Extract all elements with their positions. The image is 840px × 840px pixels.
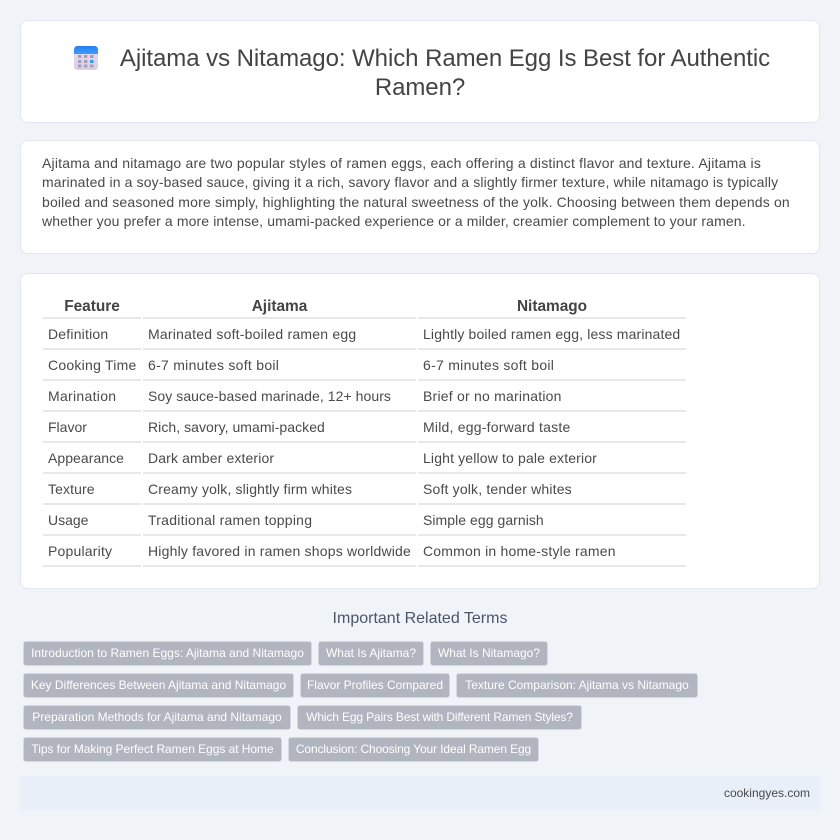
intro paragraph: marinated in a soy-based sauce, giving it a rich, savory flavor and a slightly firmer texture, while nitamago is typically	[42, 174, 778, 190]
table: Common in home-style ramen	[423, 543, 616, 559]
table: 6-7 minutes soft boil	[148, 357, 279, 373]
related term tags: Which Egg Pairs Best with Different Ramen Styles?	[306, 710, 573, 724]
table: Marinated soft-boiled ramen egg	[148, 326, 356, 342]
title: Ajitama vs Nitamago: Which Ramen Egg Is Best for Authentic	[120, 45, 770, 72]
comparison table panel	[20, 273, 820, 589]
table	[43, 298, 686, 567]
related term tags: Tips for Making Perfect Ramen Eggs at Home	[31, 742, 274, 756]
footer bar	[20, 776, 820, 810]
table: Cooking Time	[48, 357, 137, 373]
table header: Feature	[64, 298, 120, 315]
related term tags: Key Differences Between Ajitama and Nitamago	[31, 678, 286, 692]
related term tags: Flavor Profiles Compared	[307, 678, 443, 692]
table: Traditional ramen topping	[148, 512, 312, 528]
footer source text: cookingyes.com	[724, 786, 810, 800]
table: Nitamago	[517, 298, 587, 315]
related terms heading: Important Related Terms	[333, 610, 507, 627]
icon: calendar	[74, 46, 98, 70]
table: Simple egg garnish	[423, 512, 544, 528]
table: Flavor	[48, 419, 87, 435]
header card	[20, 20, 820, 123]
intro paragraph: whether you prefer a more intense, umami-packed experience or a milder, creamier complement to your ramen.	[42, 213, 746, 229]
table: Appearance	[48, 450, 124, 466]
table: Brief or no marination	[423, 388, 562, 404]
table: Lightly boiled ramen egg, less marinated	[423, 326, 680, 342]
table: Dark amber exterior	[148, 450, 274, 466]
table: Soft yolk, tender whites	[423, 481, 572, 497]
table: Creamy yolk, slightly firm whites	[148, 481, 352, 497]
related term tags: What Is Ajitama?	[326, 646, 416, 660]
related term tags: Introduction to Ramen Eggs: Ajitama and Nitamago	[31, 646, 304, 660]
table: 6-7 minutes soft boil	[423, 357, 554, 373]
table: Highly favored in ramen shops worldwide	[148, 543, 411, 559]
table: Ajitama	[252, 298, 307, 315]
table: Definition	[48, 326, 108, 342]
title: Ramen?	[375, 74, 465, 101]
intro paragraph: Ajitama and nitamago are two popular styles of ramen eggs, each offering a distinct flavor and texture. Ajitama is	[42, 155, 761, 171]
table: Popularity	[48, 543, 112, 559]
related term tags	[23, 641, 698, 762]
table: Usage	[48, 512, 88, 528]
table: Mild, egg-forward taste	[423, 419, 570, 435]
related term tags: What Is Nitamago?	[438, 646, 540, 660]
intro text panel	[20, 140, 820, 254]
table: Light yellow to pale exterior	[423, 450, 597, 466]
title	[120, 45, 770, 101]
intro paragraph: boiled and seasoned more simply, highlighting the natural sweetness of the yolk. Choosing between them depends on	[42, 194, 790, 210]
table: Marination	[48, 388, 116, 404]
intro paragraph	[42, 155, 790, 229]
table: Texture	[48, 481, 95, 497]
related term tags: Conclusion: Choosing Your Ideal Ramen Egg	[296, 742, 531, 756]
related term tags: Texture Comparison: Ajitama vs Nitamago	[465, 678, 689, 692]
table: Soy sauce-based marinade, 12+ hours	[148, 388, 391, 404]
related term tags: Preparation Methods for Ajitama and Nitamago	[32, 710, 282, 724]
table: Rich, savory, umami-packed	[148, 419, 325, 435]
